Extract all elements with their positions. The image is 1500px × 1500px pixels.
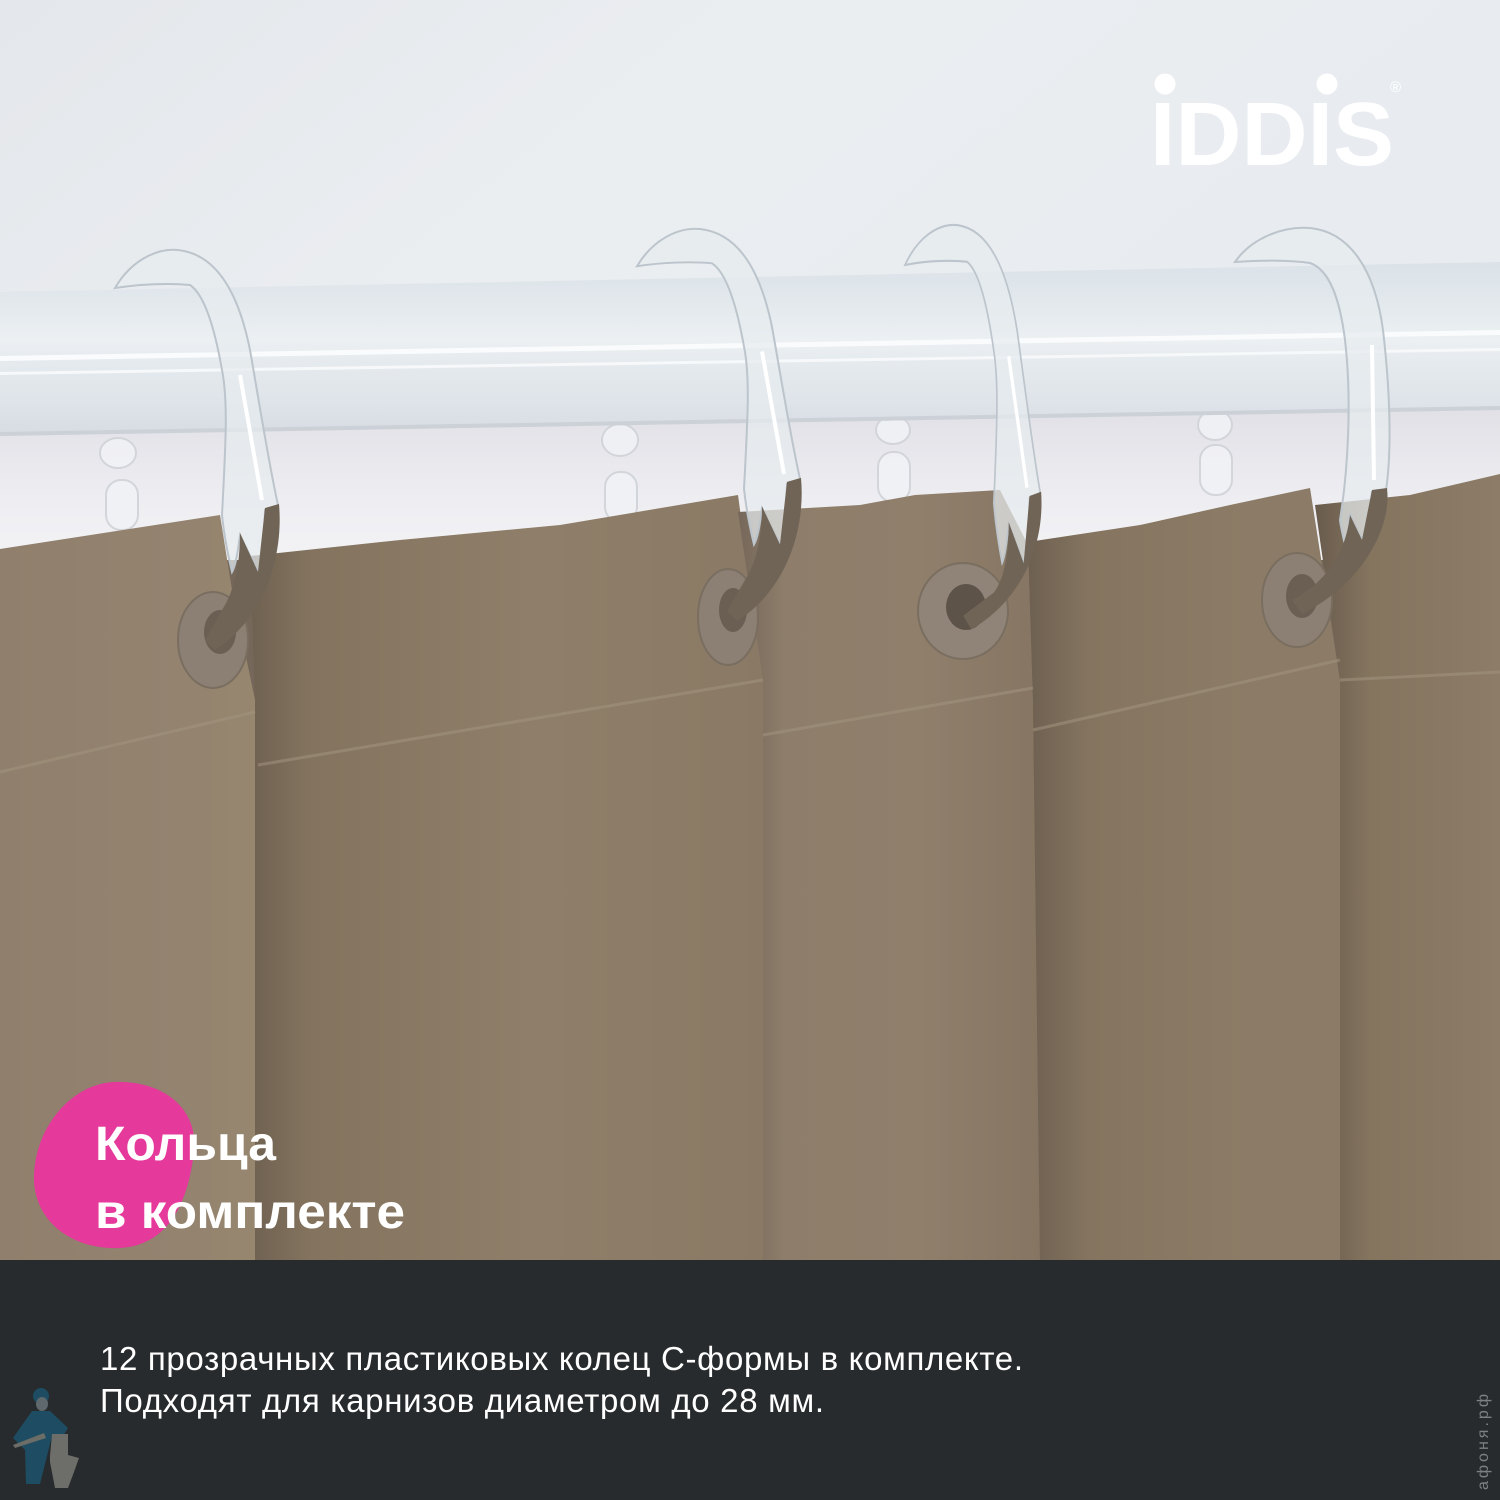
description text: 12 прозрачных пластиковых колец С-формы в комплекте. <box>100 1340 1023 1377</box>
curtain rod <box>0 262 1500 436</box>
ring 2 <box>637 229 802 621</box>
pink blob <box>34 1082 194 1248</box>
glass beads behind the curtain <box>100 410 1232 530</box>
logo: IDDIS: ® <box>1390 79 1401 96</box>
ring 1 <box>115 250 280 650</box>
eyelet: ring 3 <box>918 563 1008 659</box>
description text <box>100 1340 1023 1419</box>
ring 4 <box>1235 228 1390 614</box>
icon: plumber with toilet <box>13 1388 79 1488</box>
logo: IDDIS: IDDIS <box>1150 85 1394 185</box>
shower curtain panels <box>0 474 1500 1260</box>
eyelet: ring 2 <box>698 569 758 665</box>
watermark: афоня.рф: афоня.рф <box>1475 1394 1492 1490</box>
ring 3 <box>905 225 1042 629</box>
heading: Кольца <box>95 1118 276 1171</box>
heading: в комплекте <box>95 1186 405 1239</box>
eyelet: ring 1 <box>178 592 248 688</box>
wall background <box>0 0 1500 300</box>
heading <box>95 1118 405 1239</box>
dark footer band <box>0 1260 1500 1500</box>
eyelet: ring 4 <box>1262 553 1332 647</box>
description text: Подходят для карнизов диаметром до 28 мм. <box>100 1382 824 1419</box>
shaded wall under the rod <box>0 400 1500 600</box>
